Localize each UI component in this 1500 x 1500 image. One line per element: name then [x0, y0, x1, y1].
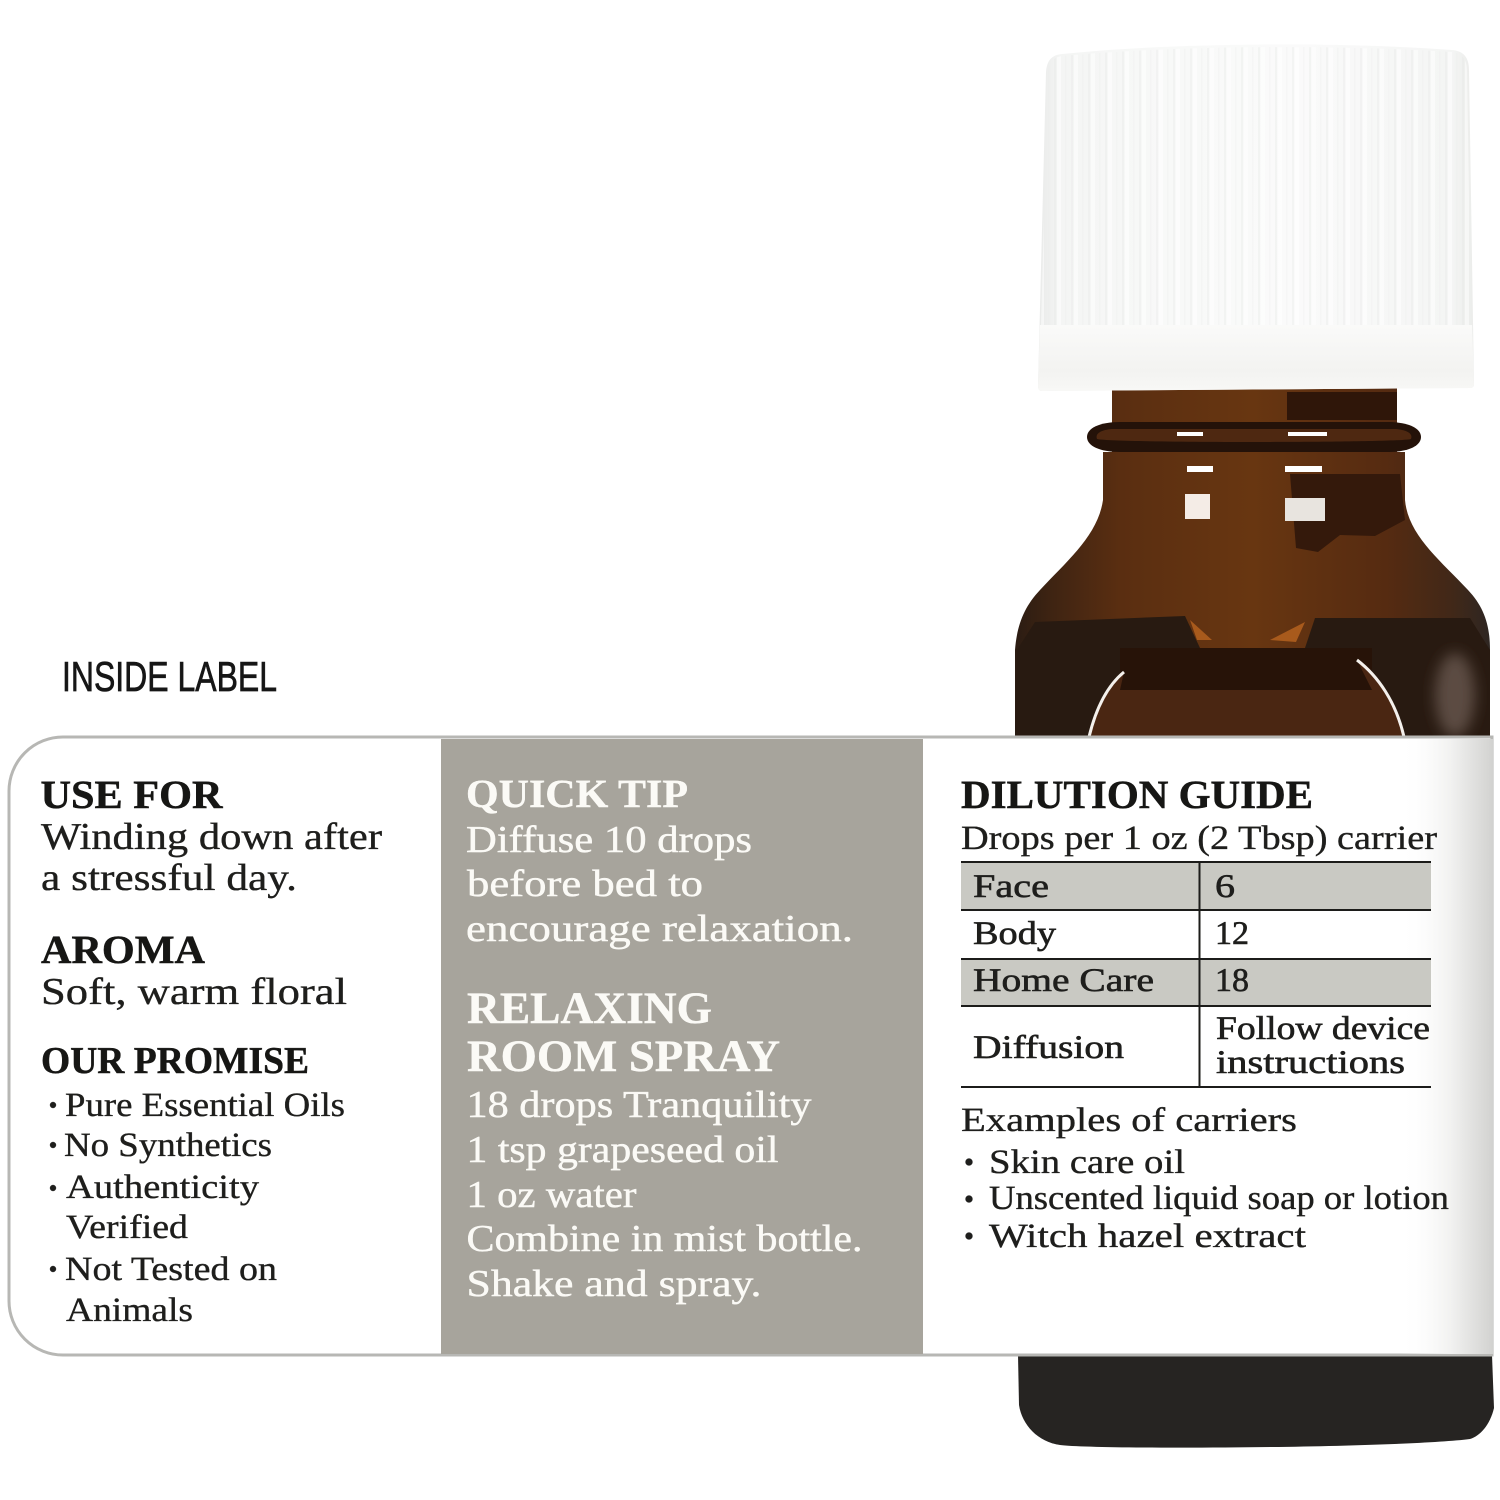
heading: use for: USE FOR	[40, 772, 224, 817]
row: face: 6	[1215, 869, 1235, 905]
bottle glass shoulder	[1015, 388, 1490, 740]
right edge shading	[1400, 739, 1493, 1354]
heading: relaxing room spray: ROOM SPRAY	[467, 1031, 780, 1081]
list: promises: Not Tested on	[65, 1251, 277, 1288]
text: quick tip body: before bed to	[467, 863, 703, 905]
row: diffusion	[973, 1011, 1430, 1081]
heading: relaxing room spray	[467, 983, 780, 1081]
text: room spray recipe: Combine in mist bottle.	[466, 1218, 862, 1260]
list: carriers	[966, 1144, 1449, 1255]
panel: quick tip column	[441, 739, 923, 1354]
bottle highlights	[1089, 432, 1404, 737]
text: use for body: Winding down after	[41, 816, 382, 858]
dilution table	[961, 862, 1431, 1087]
text: quick tip body: Diffuse 10 drops	[466, 819, 752, 861]
row: home care	[973, 963, 1249, 999]
text: quick tip body: encourage relaxation.	[466, 908, 853, 950]
text: room spray recipe: 1 tsp grapeseed oil	[466, 1129, 778, 1171]
panel: use for column	[40, 772, 382, 1329]
list: carriers: Unscented liquid soap or lotion	[989, 1180, 1449, 1217]
text: drops per carrier: Drops per 1 oz (2 Tbsp) carrier	[961, 820, 1438, 857]
list: carriers: Witch hazel extract	[989, 1218, 1307, 1255]
list: promises: Authenticity	[66, 1169, 259, 1206]
heading: aroma: AROMA	[41, 927, 205, 972]
heading: quick tip: QUICK TIP	[466, 771, 688, 816]
bottle cap	[1038, 44, 1474, 391]
row: face: Face	[973, 869, 1049, 905]
text: aroma body: Soft, warm floral	[41, 971, 347, 1013]
bottle base	[1018, 1355, 1494, 1448]
text: quick tip body	[466, 819, 853, 950]
heading: dilution guide: DILUTION GUIDE	[961, 772, 1313, 817]
list: promises: Pure Essential Oils	[65, 1087, 345, 1124]
row: body: Body	[973, 916, 1057, 952]
list: promises: Verified	[66, 1209, 188, 1246]
label panel	[9, 737, 1493, 1355]
text: use for body: a stressful day.	[41, 857, 297, 899]
row: diffusion: instructions	[1216, 1045, 1405, 1081]
row: diffusion: Diffusion	[973, 1030, 1124, 1066]
text: room spray recipe: 1 oz water	[466, 1174, 637, 1216]
row: body	[973, 916, 1249, 952]
text: room spray recipe: 18 drops Tranquility	[466, 1084, 812, 1126]
list: promises	[50, 1087, 345, 1329]
text: use for body	[41, 816, 382, 899]
list: promises: Animals	[66, 1292, 193, 1329]
heading: relaxing room spray: RELAXING	[467, 983, 712, 1033]
row: home care: Home Care	[973, 963, 1154, 999]
text: examples of carriers: Examples of carriers	[961, 1102, 1297, 1139]
bottle	[1015, 44, 1494, 1448]
list: carriers: Skin care oil	[989, 1144, 1185, 1181]
row: home care: 18	[1215, 963, 1249, 999]
row: face	[973, 869, 1235, 905]
heading: our promise: OUR PROMISE	[41, 1040, 309, 1082]
heading: inside label: INSIDE LABEL	[62, 653, 277, 700]
list: promises: No Synthetics	[64, 1127, 272, 1164]
text: room spray recipe: Shake and spray.	[466, 1263, 762, 1305]
row: diffusion: Follow device	[1216, 1011, 1430, 1047]
row: body: 12	[1215, 916, 1249, 952]
text: room spray recipe	[466, 1084, 862, 1305]
panel: dilution guide column	[961, 772, 1449, 1255]
